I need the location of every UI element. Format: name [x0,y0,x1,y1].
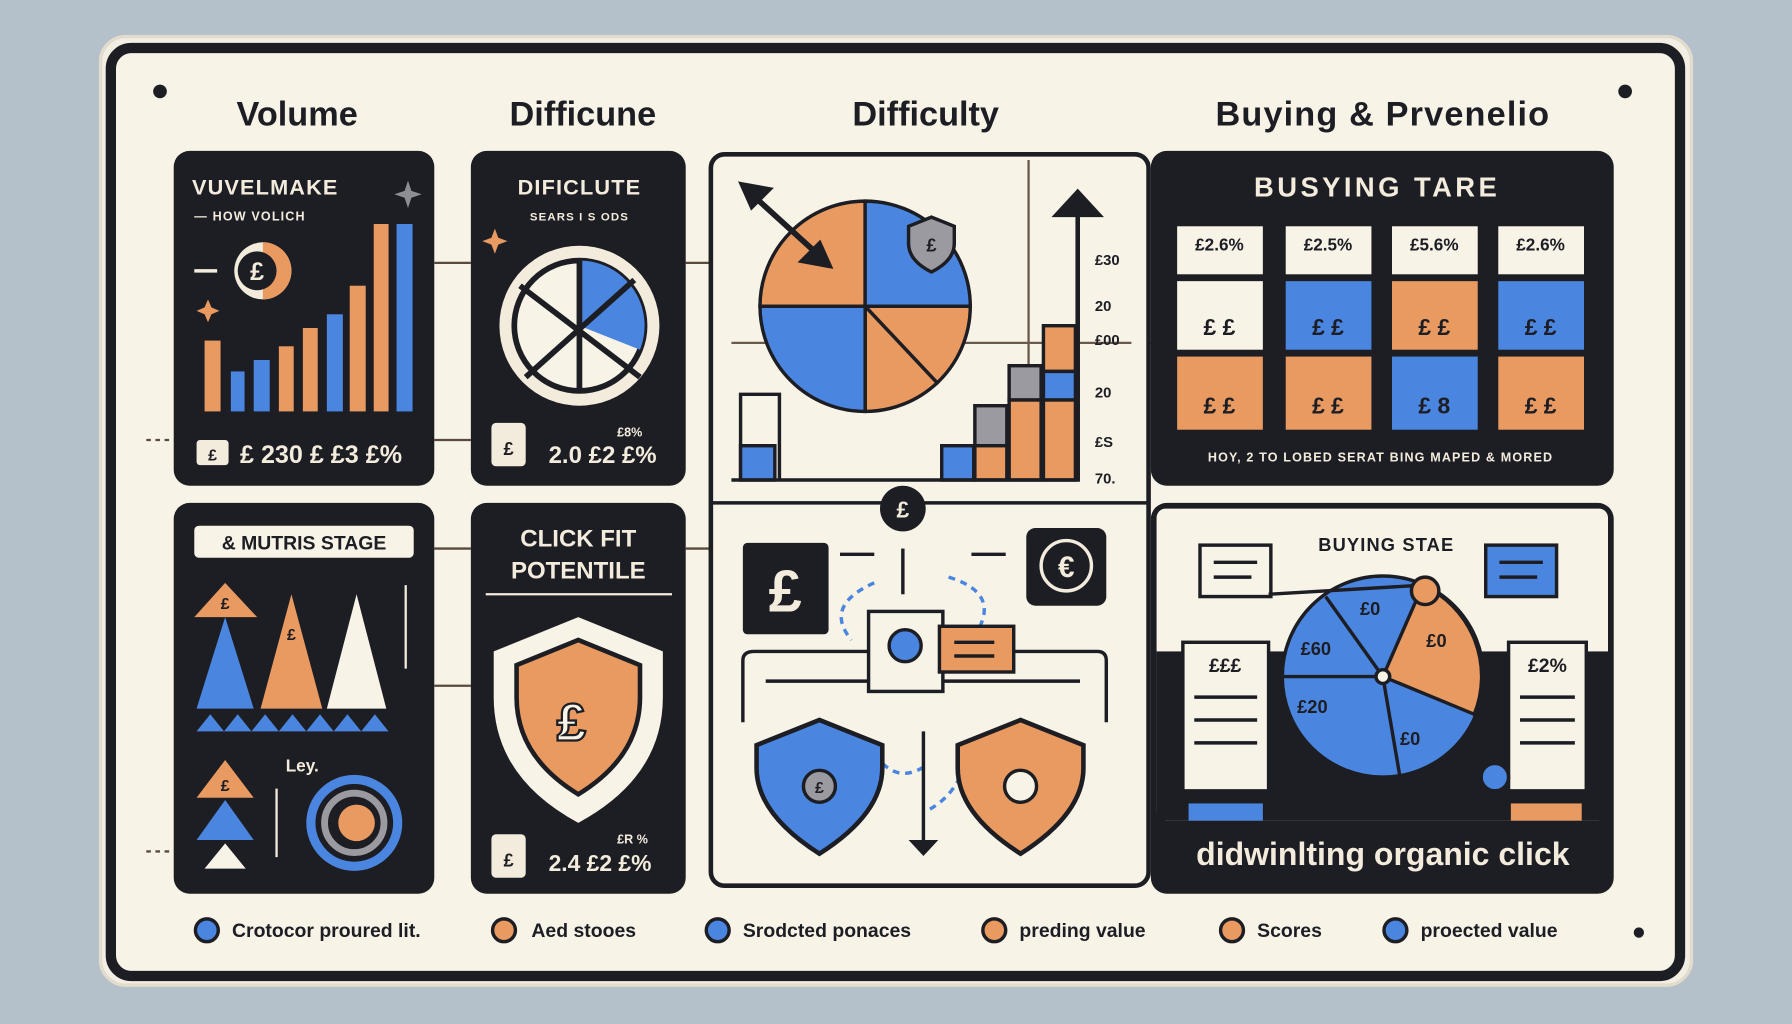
flow diagram [743,549,1106,846]
icon: shield: £ [557,694,586,753]
panel: buying stage: didwinlting organic click [1196,836,1570,872]
icon: gauge [499,246,659,406]
heading: Buying & Prvenelio: Buying & Prvenelio [1215,96,1550,134]
axis: £S [1095,435,1113,451]
icon: euro badge [1026,528,1106,606]
axis: 20 [1095,386,1111,402]
heading: Volume: Volume [237,96,358,134]
icon: blue shield [757,720,882,854]
pie chart [1269,576,1509,791]
panel: buying table: £ 8 [1418,393,1450,419]
panel: buying table [1151,151,1614,486]
icon: coin [234,242,291,299]
icon: coin center: £ [896,497,909,523]
panel: click fit potentile: POTENTILE [511,557,646,584]
icon: triangles [194,583,406,731]
panel: difficulty gauge [471,151,686,486]
pie chart: £0 [1426,630,1447,651]
panel: buying stage: BUYING STAE [1318,534,1454,555]
legend: Srodcted ponaces [743,920,911,942]
icon: docs: £2% [1528,655,1567,677]
panel: buying table: £ £ [1418,314,1450,340]
heading: Difficulty: Difficulty [852,96,999,134]
legend: preding value [1019,920,1146,942]
panel: buying table: £ £ [1525,393,1557,419]
bar chart [205,224,413,411]
legend: Crotocor proured lit. [232,920,421,942]
panel: click fit potentile [471,503,686,894]
panel: buying table: £ £ [1204,314,1236,340]
axis [1051,189,1120,487]
panel: click fit potentile: £ [503,849,514,870]
panel: buying table: £ £ [1525,314,1557,340]
legend [195,919,1642,942]
panel: buying table: BUSYING TARE [1254,172,1500,203]
icon: coin center [880,486,926,531]
panel: mutris stage [174,503,434,894]
icon: coin: £ [250,258,264,286]
axis: £00 [1095,333,1120,349]
panel: mutris stage: & MUTRIS STAGE [222,533,386,555]
panel: difficulty gauge: 2.0 £2 £% [549,442,657,469]
panel: difficulty gauge: £8% [617,426,642,440]
pie chart: £60 [1301,638,1331,659]
icon: shield [909,217,954,272]
legend: Scores [1257,920,1322,942]
icon: docs: £££ [1209,655,1242,677]
panel: buying table: £5.6% [1410,234,1459,254]
icon: orange shield [958,720,1083,854]
icon: target [197,755,398,869]
panel: volume: VUVELMAKE [192,174,339,199]
panel: click fit potentile: £R % [617,832,648,846]
panel: buying table: £2.6% [1516,234,1565,254]
pie chart: £0 [1400,728,1420,749]
panel: buying table: £ £ [1312,393,1344,419]
icon: pound box: £ [769,557,802,624]
icon: lock: £ [208,448,217,465]
connector lines [146,263,1154,851]
icon: pound box [743,543,829,634]
panel: difficulty gauge: £ [503,438,514,459]
icon: shield: £ [926,234,937,255]
panel: difficulty gauge: SEARS I S ODS [530,212,629,224]
panel: center difficulty chart [711,154,1149,886]
arrow [743,185,829,265]
heading: Difficune: Difficune [510,96,656,134]
icon: triangles: £ [287,627,296,644]
axis: 70. [1095,471,1115,487]
icon: euro badge: € [1058,551,1075,584]
panel: buying table: £ £ [1204,393,1236,419]
panel: buying table: HOY, 2 TO LOBED SERAT BING MAPED & MORED [1208,451,1553,465]
panel: click fit potentile: 2.4 £2 £% [549,850,651,876]
panel: buying stage [1151,503,1614,894]
pie chart: £20 [1297,696,1328,717]
panel: difficulty gauge: DIFICLUTE [518,174,641,199]
icon: blue shield: £ [815,780,824,797]
panel: volume [174,151,434,486]
pie chart [760,201,970,411]
panel: volume: — HOW VOLICH [194,210,306,224]
panel: buying table: £ £ [1312,314,1344,340]
axis: £30 [1095,253,1120,269]
icon: triangles: £ [221,596,230,613]
bar chart [731,326,1080,480]
panel: click fit potentile: CLICK FIT [520,525,637,552]
icon: shield [494,617,663,823]
pie chart: £0 [1360,598,1380,619]
axis: 20 [1095,299,1111,315]
icon: target: Ley. [286,755,319,775]
icon: docs [1183,545,1586,821]
legend: proected value [1421,920,1558,942]
icon: target: £ [221,778,230,795]
panel: buying table: £2.5% [1304,234,1352,254]
panel: volume: £ 230 £ £3 £% [240,441,402,469]
icon: sparkle [394,181,422,208]
icon: lock [197,440,229,465]
legend: Aed stooes [531,920,636,942]
panel: buying table: £2.6% [1195,234,1244,254]
